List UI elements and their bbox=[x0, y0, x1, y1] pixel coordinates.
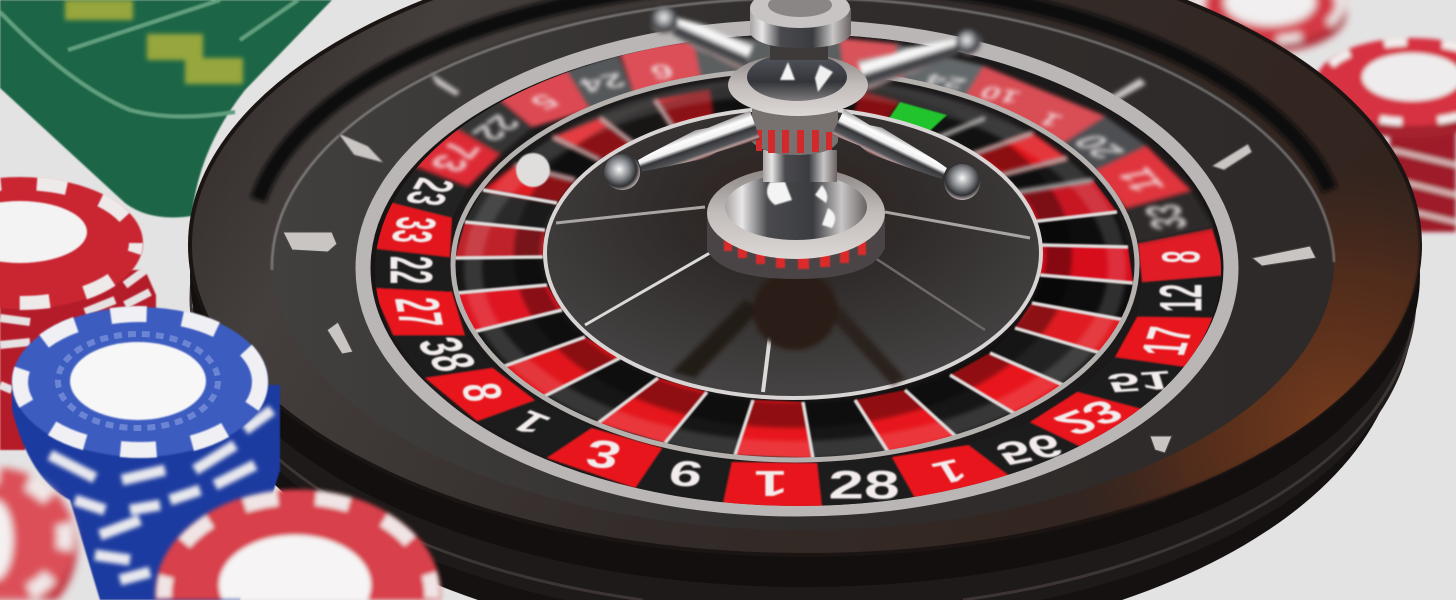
number labels on ring: 5 bbox=[523, 89, 567, 114]
back segments blurred bbox=[411, 36, 1214, 243]
number labels on ring: 1 bbox=[502, 404, 561, 440]
front pockets bbox=[455, 180, 1133, 458]
number labels on ring: 20 bbox=[1063, 131, 1135, 163]
left red chip stack bbox=[0, 177, 156, 450]
number labels on ring: 22 bbox=[462, 111, 529, 144]
number labels on ring: 8 bbox=[449, 380, 513, 404]
number labels on ring: 24 bbox=[919, 70, 971, 93]
hub neck bbox=[763, 150, 837, 182]
number ring segments bbox=[371, 34, 1226, 509]
number labels on ring: 1 bbox=[1032, 108, 1070, 131]
hub cap bbox=[750, 0, 851, 48]
inner bowl bbox=[258, 0, 1334, 530]
hub collar band bbox=[752, 105, 838, 155]
number labels on ring bbox=[377, 60, 1215, 507]
red stack side bbox=[0, 270, 156, 450]
turret hub bbox=[707, 0, 885, 279]
hub top neck bbox=[770, 42, 828, 60]
bottom left red chip bbox=[0, 468, 77, 600]
number labels on ring: 6 bbox=[665, 453, 707, 495]
front right turret arm bbox=[830, 106, 986, 206]
back pockets bbox=[483, 90, 1093, 203]
number labels on ring: 8 bbox=[1151, 251, 1211, 263]
number labels on ring: 24 bbox=[574, 68, 632, 97]
hub reflection on floor bbox=[672, 270, 905, 385]
chip stack: right red chips bbox=[1316, 38, 1456, 232]
number labels on ring: 1 bbox=[754, 463, 788, 503]
number labels on ring: 38 bbox=[403, 333, 489, 376]
number labels on ring: 23 bbox=[1044, 393, 1134, 442]
bowl diamond markers bbox=[283, 72, 1316, 453]
silver outer ring bbox=[363, 27, 1231, 509]
number labels on ring: 11 bbox=[1106, 165, 1175, 195]
floor spokes bbox=[556, 207, 1030, 392]
number labels on ring: 73 bbox=[419, 137, 490, 176]
number labels on ring: 22 bbox=[377, 256, 445, 284]
number labels on ring: 1 bbox=[926, 452, 973, 490]
ivory ball bbox=[516, 153, 550, 187]
number labels on ring: 28 bbox=[828, 463, 900, 507]
green zero pocket bbox=[888, 101, 948, 130]
ring between numbers and pockets bbox=[453, 70, 1137, 460]
front left turret arm bbox=[599, 108, 761, 195]
hub base bbox=[707, 215, 885, 279]
blue chip stack bbox=[12, 307, 280, 600]
back right turret arm bbox=[857, 23, 986, 91]
back left turret arm bbox=[645, 1, 754, 72]
hub upper dome bbox=[747, 53, 847, 101]
chip stack: top right red chip bbox=[1194, 0, 1346, 52]
blue chip side bbox=[12, 385, 280, 600]
inner pockets ring bbox=[453, 70, 1137, 460]
wheel wood rim bbox=[188, 0, 1422, 553]
number labels on ring: 12 bbox=[1147, 284, 1215, 312]
number labels on ring: 10 bbox=[975, 81, 1026, 107]
red chip top bbox=[0, 177, 143, 309]
number labels on ring: 27 bbox=[380, 296, 455, 328]
number labels on ring: 33 bbox=[1135, 202, 1199, 231]
bottom red chip bbox=[155, 489, 441, 600]
number labels on ring: 6 bbox=[647, 60, 677, 84]
number labels on ring: 51 bbox=[1103, 365, 1176, 398]
number labels on ring: 56 bbox=[988, 427, 1071, 472]
pocket shading bbox=[527, 95, 1059, 415]
hub collar top bbox=[728, 54, 868, 116]
front segments sharp bbox=[371, 165, 1226, 509]
hub lower dome bbox=[725, 174, 867, 240]
blue chip top bbox=[12, 307, 268, 457]
green felt layout bbox=[0, 0, 332, 217]
number labels on ring: 3 bbox=[581, 431, 625, 478]
number labels on ring: 17 bbox=[1129, 325, 1207, 357]
wheel centre floor bbox=[545, 108, 1041, 398]
pocket dividers bbox=[455, 190, 1133, 458]
number labels on ring: 23 bbox=[393, 175, 467, 208]
number labels on ring: 33 bbox=[378, 215, 448, 244]
